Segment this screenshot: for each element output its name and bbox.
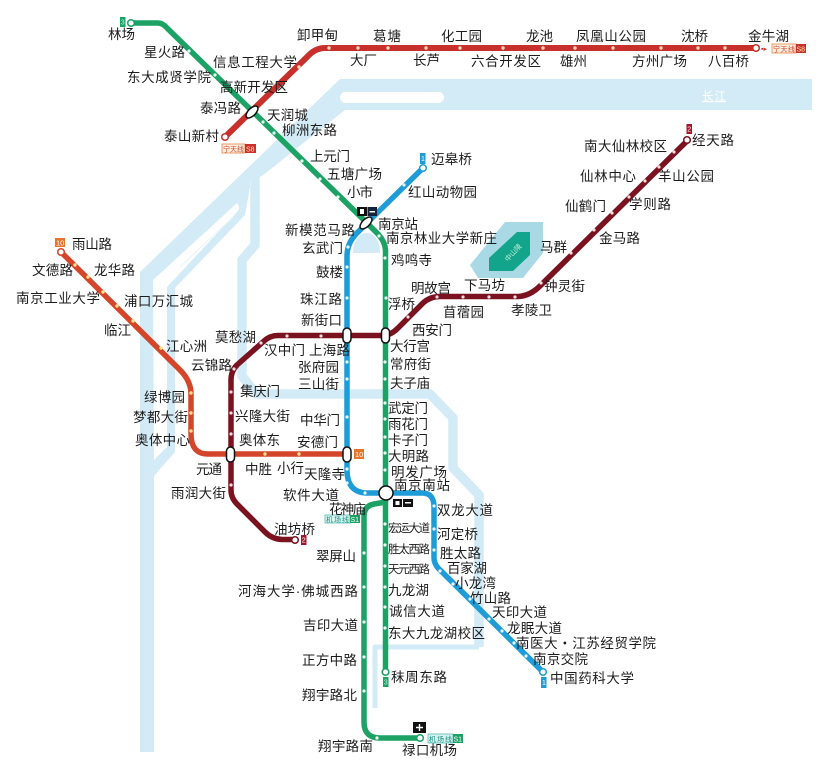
labels: line 2 west — [171, 330, 316, 537]
labels: line 3 north: 南京站 — [378, 217, 418, 232]
tag: airport line S1 (south) — [428, 734, 463, 744]
labels: line 3 central: 大行宫 — [390, 339, 430, 354]
labels: line S8: 八百桥 — [708, 54, 750, 69]
line number tags: 10 — [355, 450, 363, 459]
labels: line 1 north: 软件大道 — [283, 488, 339, 503]
labels: line 3 central: 南京南站 — [394, 478, 450, 493]
labels: line 3 south: 秣周东路 — [391, 669, 448, 685]
labels: line 1 north — [283, 152, 477, 503]
labels: line 10: 中胜 — [245, 462, 272, 477]
labels: line S1: 河海大学·佛城西路 — [238, 584, 358, 599]
labels: line 2 east: 羊山公园 — [658, 169, 714, 184]
labels: line 3 south: 九龙湖 — [388, 583, 429, 598]
labels: line 3 north: 柳洲东路 — [282, 123, 338, 138]
labels: line 2 east: 南大仙林校区 — [584, 138, 667, 154]
rivers and water background — [140, 79, 812, 752]
line 3 station dots — [187, 49, 388, 630]
labels: line 1 north: 新模范马路 — [285, 223, 356, 238]
labels: line 1 north: 珠江路 — [300, 292, 342, 307]
tag: Ningtian line S8 (west) — [222, 144, 256, 154]
tag: Ningtian line S8 (west): S8 — [246, 146, 255, 154]
line number tags: 2 — [687, 126, 691, 134]
lake and Zhongshan scenic area — [470, 222, 543, 278]
terminal stations — [58, 20, 759, 741]
labels: line S8: 方州广场 — [632, 54, 687, 69]
S1 station dots — [362, 551, 379, 740]
labels: line 10: 江心洲 — [166, 339, 207, 354]
labels: line 2 east: 明故宫 — [411, 281, 451, 296]
labels: line 3 central: 卡子门 — [388, 433, 428, 448]
tag: Ningtian line S8 (west): 宁天线 — [223, 144, 244, 154]
labels: line 3 central: 大明路 — [388, 449, 430, 464]
labels: line S8: 雄州 — [560, 54, 587, 69]
labels: line 1 north: 红山动物园 — [408, 185, 477, 200]
labels: line 10 — [16, 237, 304, 477]
labels: line 3 south: 胜太西路 — [388, 542, 430, 556]
line number tags: 1 — [421, 156, 425, 163]
labels: line 1 north: 玄武门 — [302, 240, 343, 256]
labels: line S8: 高新开发区 — [220, 79, 288, 95]
labels: line S8: 龙池 — [526, 29, 553, 44]
labels: line S1: 翔宇路南 — [318, 739, 373, 754]
labels: line 3 central — [388, 339, 450, 493]
labels: line 1 north: 鼓楼 — [316, 265, 343, 280]
labels: line 3 south — [388, 521, 485, 685]
labels: line 2 west: 油坊桥 — [274, 522, 316, 537]
labels: line 1 south — [437, 503, 656, 686]
labels: line 10: 浦口万汇城 — [124, 294, 194, 309]
labels: line S1: 花神庙 — [329, 502, 366, 517]
labels: line 1 south: 天印大道 — [492, 605, 547, 620]
labels: line 1 south: 双龙大道 — [437, 503, 493, 518]
line 10 station dots — [73, 263, 301, 456]
labels: line S1 — [238, 502, 457, 758]
labels: line 2 east: 孝陵卫 — [511, 303, 552, 318]
labels: line 10: 奥体中心 — [135, 432, 190, 448]
line 3 green — [131, 23, 388, 672]
labels: line S1: 吉印大道 — [303, 618, 358, 633]
labels: line 2 west: 莫愁湖 — [215, 330, 256, 345]
labels: line S8 — [164, 28, 789, 144]
labels: line 1 south: 南京交院 — [533, 651, 588, 667]
tag: airport line S1 (north): 机场线 — [326, 515, 349, 524]
labels: line 2 east — [411, 133, 734, 338]
line 2 dark red — [229, 140, 688, 540]
labels: line 2 east: 钟灵街 — [544, 278, 585, 294]
lake and Zhongshan scenic area: 中山陵 — [503, 242, 524, 263]
labels: line 1 south: 胜太路 — [440, 546, 482, 561]
labels: line S1: 翔宇路北 — [302, 688, 358, 703]
labels: line 10: 龙华路 — [94, 263, 136, 278]
labels: line 2 east: 西安门 — [412, 323, 452, 338]
labels: line 1 north: 三山街 — [298, 377, 339, 392]
labels: line 1 north: 天隆寺 — [304, 467, 345, 482]
labels: line 2 east: 苜蓿园 — [443, 304, 484, 320]
labels: line 2 east: 经天路 — [692, 133, 734, 148]
labels: line 3 south: 诚信大道 — [389, 604, 445, 619]
labels: line 10: 临江 — [104, 323, 131, 338]
labels: line 3 north: 浮桥 — [388, 297, 416, 312]
labels: line 3 north: 星火路 — [144, 45, 186, 60]
labels: line 3 north: 天润城 — [267, 108, 308, 123]
icons: Nanjing South station rail — [393, 499, 413, 507]
labels: line 10: 小行 — [277, 461, 304, 476]
labels: line S8: 凤凰山公园 — [576, 29, 646, 44]
line number tags: 3 — [121, 20, 125, 26]
labels: line 2 east: 仙林中心 — [580, 169, 636, 184]
tag: Ningtian line S8 (east) with arrow: S8 — [796, 46, 805, 54]
labels: line 3 south: 宏运大道 — [388, 521, 430, 535]
labels: line 1 north: 新街口 — [301, 313, 342, 328]
labels: line 2 west: 雨润大街 — [171, 486, 226, 501]
labels: line 3 north: 上元门 — [310, 149, 350, 164]
labels: line 2 west: 集庆门 — [240, 384, 280, 399]
labels: line 1 south: 竹山路 — [470, 591, 512, 606]
labels: line 3 north: 鸡鸣寺 — [391, 252, 432, 268]
icons: Nanjing station rail — [357, 207, 377, 216]
line 1 station dots — [345, 183, 528, 658]
labels: line 1 south: 小龙湾 — [455, 575, 496, 591]
labels: line 10: 文德路 — [32, 263, 74, 278]
labels: line 3 south: 东大九龙湖校区 — [388, 625, 485, 641]
labels: line S1: 翠屏山 — [316, 549, 356, 564]
line number tags — [55, 17, 692, 688]
line number tags: 10 — [56, 238, 64, 248]
labels: line S1: 正方中路 — [302, 653, 358, 668]
labels: line S8: 金牛湖 — [748, 29, 789, 44]
labels: line 3 north: 东大成贤学院 — [127, 70, 212, 85]
labels: line 3 north: 林场 — [108, 27, 135, 42]
line number tags: 2 — [302, 538, 306, 544]
labels: line 1 north: 迈皋桥 — [431, 152, 472, 167]
labels: line S8: 化工园 — [441, 29, 482, 44]
labels: line S8: 沈桥 — [681, 29, 708, 44]
labels: line 2 west: 汉中门 — [264, 343, 305, 358]
line S1 airport green — [362, 502, 420, 740]
labels: line 10: 南京工业大学 — [16, 291, 100, 306]
tag: airport line S1 (south): S1 — [454, 736, 462, 744]
labels: line S8: 卸甲甸 — [297, 28, 338, 43]
labels: line 2 east: 学则路 — [629, 197, 672, 212]
labels: line 10: 雨山路 — [72, 237, 112, 252]
labels: line 1 south: 河定桥 — [437, 527, 478, 542]
labels: line 2 west: 兴隆大街 — [235, 409, 290, 424]
interchange stations — [226, 104, 393, 500]
labels: line 2 east: 金马路 — [599, 231, 640, 246]
labels: line 2 east: 马群 — [540, 240, 568, 255]
labels: line 3 central: 常府街 — [390, 357, 431, 372]
labels: line 2 west: 云锦路 — [191, 358, 232, 373]
line number tags: 1 — [542, 680, 546, 687]
line number tags: 3 — [384, 680, 388, 686]
labels: line 3 north: 南京林业大学新庄 — [386, 230, 497, 246]
line 1 blue — [345, 168, 543, 672]
labels: line 1 south: 南医大・江苏经贸学院 — [516, 636, 656, 651]
S8 station dots — [297, 46, 727, 69]
labels: line 10: 梦都大街 — [133, 410, 188, 425]
tag: Ningtian line S8 (east) with arrow: ▪▸ — [761, 46, 767, 53]
tag: airport line S1 (south): 机场线 — [429, 734, 452, 744]
labels: line S8: 六合开发区 — [471, 54, 541, 69]
line S8 red — [225, 46, 756, 137]
labels: line 2 west: 元通 — [196, 462, 222, 477]
labels: line 3 north: 小市 — [347, 184, 373, 200]
labels: line 1 south: 百家湖 — [447, 560, 487, 576]
tag: airport line S1 (north) — [325, 515, 360, 524]
river name: 长江: 长江 — [702, 90, 726, 103]
labels: line 3 central: 夫子庙 — [390, 376, 430, 391]
line 10 orange-red — [61, 252, 347, 456]
labels: line 1 south: 龙眠大道 — [507, 621, 562, 636]
labels: line 1 north: 中华门 — [300, 413, 340, 428]
labels: line 1 north: 安德门 — [297, 435, 338, 450]
tag: Ningtian line S8 (east) with arrow: 宁天线 — [773, 44, 795, 54]
labels: line S8: 长芦 — [413, 53, 440, 68]
icon: airport — [413, 722, 426, 733]
labels: line 2 west: 奥体东 — [239, 432, 280, 448]
labels: line 3 central: 雨花门 — [388, 417, 428, 432]
labels: line 3 central: 武定门 — [388, 401, 428, 416]
tag: Ningtian line S8 (east) with arrow — [761, 44, 806, 54]
labels: line 2 east: 仙鹤门 — [565, 199, 606, 214]
tag: airport line S1 (north): S1 — [350, 517, 359, 524]
labels: line 2 east: 下马坊 — [464, 278, 505, 293]
labels: line S8: 葛塘 — [373, 29, 401, 44]
labels: line S8: 大厂 — [350, 53, 377, 68]
labels: line S1: 禄口机场 — [402, 743, 457, 758]
labels: line 3 north: 泰冯路 — [200, 101, 242, 116]
labels: line 1 north: 上海路 — [309, 343, 350, 358]
line 2 station dots — [229, 150, 676, 487]
labels: line 10: 绿博园 — [144, 389, 185, 405]
labels: line 3 central: 明发广场 — [391, 465, 447, 480]
labels: line 1 north: 张府园 — [298, 360, 339, 375]
labels: line S8: 泰山新村 — [164, 129, 220, 144]
labels: line 3 north: 五塘广场 — [327, 167, 382, 182]
labels: line 3 north — [108, 27, 497, 312]
labels: line S8: 信息工程大学 — [213, 54, 297, 70]
labels: line 1 south: 中国药科大学 — [550, 671, 634, 686]
labels: line 3 south: 天元西路 — [388, 562, 430, 576]
